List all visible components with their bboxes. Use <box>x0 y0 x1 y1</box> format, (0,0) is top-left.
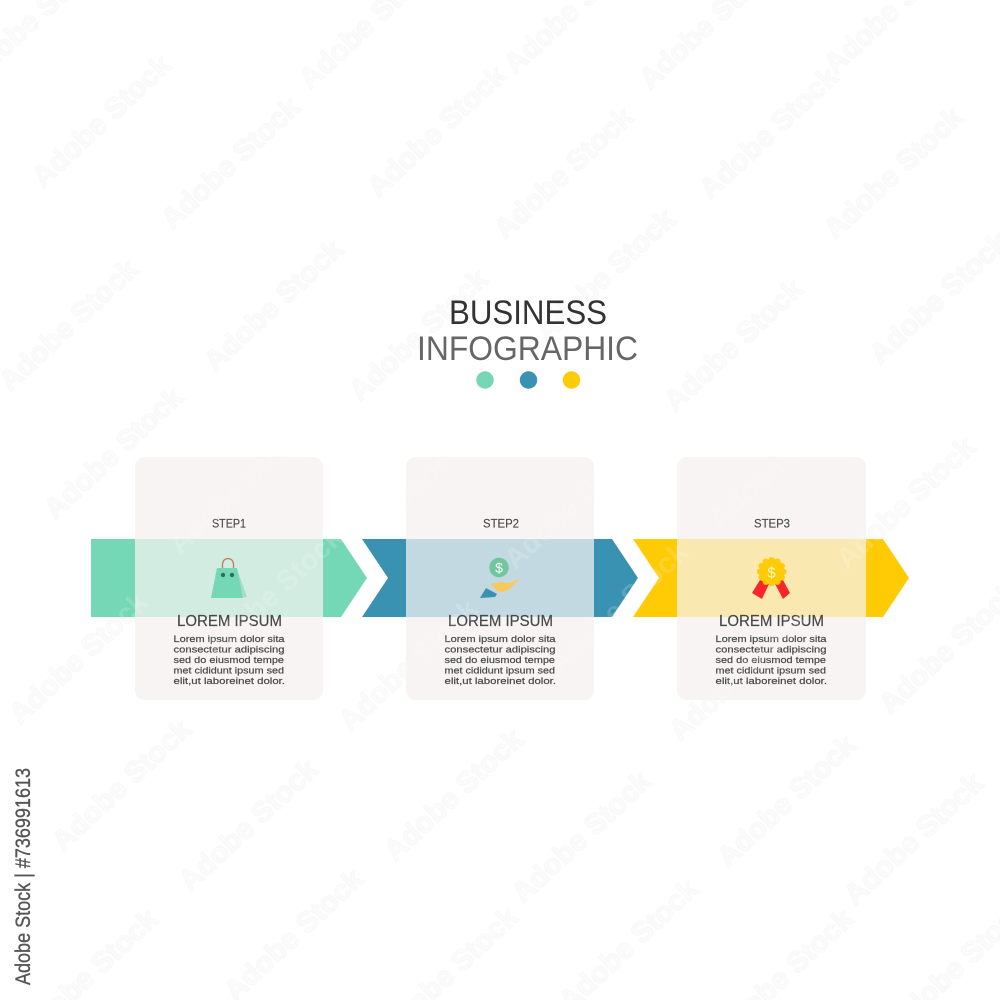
step 3 body text: consectetur adipiscing <box>716 644 826 656</box>
icon: award medal <box>752 557 790 599</box>
step 3 body text: met cididunt ipsum sed <box>716 666 826 676</box>
card 1 lower fill <box>135 617 323 700</box>
step 1 body text: Lorem ipsum dolor sita <box>174 634 285 645</box>
step 2 label: STEP2 <box>483 518 519 530</box>
step 3 heading: LOREM IPSUM <box>719 613 824 630</box>
watermark pattern: Adobe Stock <box>530 203 682 348</box>
watermark pattern: Adobe Stock <box>663 603 815 748</box>
watermark overlay on panels: Adobe Stock <box>543 536 695 681</box>
watermark pattern: Adobe Stock <box>658 273 810 418</box>
watermark pattern: Adobe Stock <box>830 431 982 576</box>
watermark overlay on panels <box>3 386 982 748</box>
arrow 3 <box>633 539 909 617</box>
icon: hand with coin <box>480 558 520 598</box>
step 1 body text: met cididunt ipsum sed <box>174 666 284 676</box>
step 1 body text: consectetur adipiscing <box>174 644 284 656</box>
icon: shopping bag <box>211 558 247 598</box>
watermark pattern: Adobe Stock <box>488 101 640 246</box>
step 1 body text: sed do eiusmod tempe <box>174 655 284 666</box>
watermark pattern: Adobe Stock <box>361 59 513 204</box>
card 2 upper fill <box>406 457 594 539</box>
step 3 body text <box>716 634 827 687</box>
watermark pattern: Adobe Stock <box>693 61 845 206</box>
title: INFOGRAPHIC <box>417 330 638 368</box>
title <box>417 294 638 368</box>
watermark overlay on panels: Adobe Stock <box>830 431 982 576</box>
panel: step 2 <box>406 457 594 700</box>
watermark pattern: Adobe Stock <box>173 753 325 898</box>
step 2 body text <box>444 634 556 687</box>
panel: step 3 <box>677 457 866 700</box>
watermark overlay on panels: Adobe Stock <box>371 386 523 531</box>
watermark pattern: Adobe Stock <box>26 49 178 194</box>
watermark pattern: Adobe Stock <box>711 729 863 874</box>
watermark overlay on panels: Adobe Stock <box>198 521 350 666</box>
step 2 heading: LOREM IPSUM <box>448 613 553 630</box>
watermark overlay on panels: Adobe Stock <box>333 593 485 738</box>
card 3 upper fill <box>677 457 866 539</box>
watermark pattern: Adobe Stock <box>46 713 198 858</box>
step 1 body text <box>174 634 285 687</box>
card 1 <box>135 457 323 700</box>
watermark pattern: Adobe Stock <box>838 767 990 912</box>
watermark pattern: Adobe Stock <box>506 765 658 910</box>
step 3 body text: sed do eiusmod tempe <box>716 655 826 666</box>
card 3 lower fill <box>677 617 866 700</box>
watermark pattern: Adobe Stock <box>333 593 485 738</box>
watermark overlay on panels: Adobe Stock <box>3 586 155 731</box>
watermark overlay on panels: Adobe Stock <box>498 431 650 576</box>
card 3 <box>677 457 866 700</box>
card 1 upper fill <box>135 457 323 539</box>
watermark overlay on panels: Adobe Stock <box>703 391 855 536</box>
title dots <box>476 371 580 389</box>
watermark pattern: Adobe Stock <box>818 101 970 246</box>
card 2 lower fill <box>406 617 594 700</box>
watermark pattern: Adobe Stock <box>343 263 495 408</box>
watermark pattern: Adobe Stock <box>378 723 530 868</box>
step 2 body text: elit,ut laboreinet dolor. <box>444 676 556 687</box>
step 1 label: STEP1 <box>212 518 246 530</box>
watermark overlay on panels: Adobe Stock <box>163 416 315 561</box>
panel: step 1 <box>135 457 323 700</box>
step 3 body text: Lorem ipsum dolor sita <box>716 634 827 645</box>
step 2 body text: Lorem ipsum dolor sita <box>444 634 556 645</box>
step 2 body text: consectetur adipiscing <box>444 644 556 656</box>
title: BUSINESS <box>449 294 607 332</box>
watermark pattern: Adobe Stock <box>155 91 307 236</box>
card 2 <box>406 457 594 700</box>
watermark pattern: Adobe Stock <box>198 233 350 378</box>
icon: hand with coin: $ <box>495 560 503 576</box>
step 1 body text: elit,ut laboreinet dolor. <box>174 676 285 687</box>
watermark pattern: Adobe Stock <box>38 381 190 526</box>
step 3 body text: elit,ut laboreinet dolor. <box>716 676 827 687</box>
stock credit: Adobe Stock | #736991613 <box>12 768 35 985</box>
arrow 1 <box>91 539 367 617</box>
step 1 heading: LOREM IPSUM <box>177 613 282 630</box>
step 2 body text: sed do eiusmod tempe <box>444 655 555 666</box>
arrow 2 <box>362 539 638 617</box>
step 3 label: STEP3 <box>754 518 790 530</box>
step 2 body text: met cididunt ipsum sed <box>444 666 555 676</box>
watermark overlay on panels: Adobe Stock <box>663 603 815 748</box>
watermark pattern: Adobe Stock <box>3 586 155 731</box>
icon: award medal: $ <box>767 564 776 582</box>
